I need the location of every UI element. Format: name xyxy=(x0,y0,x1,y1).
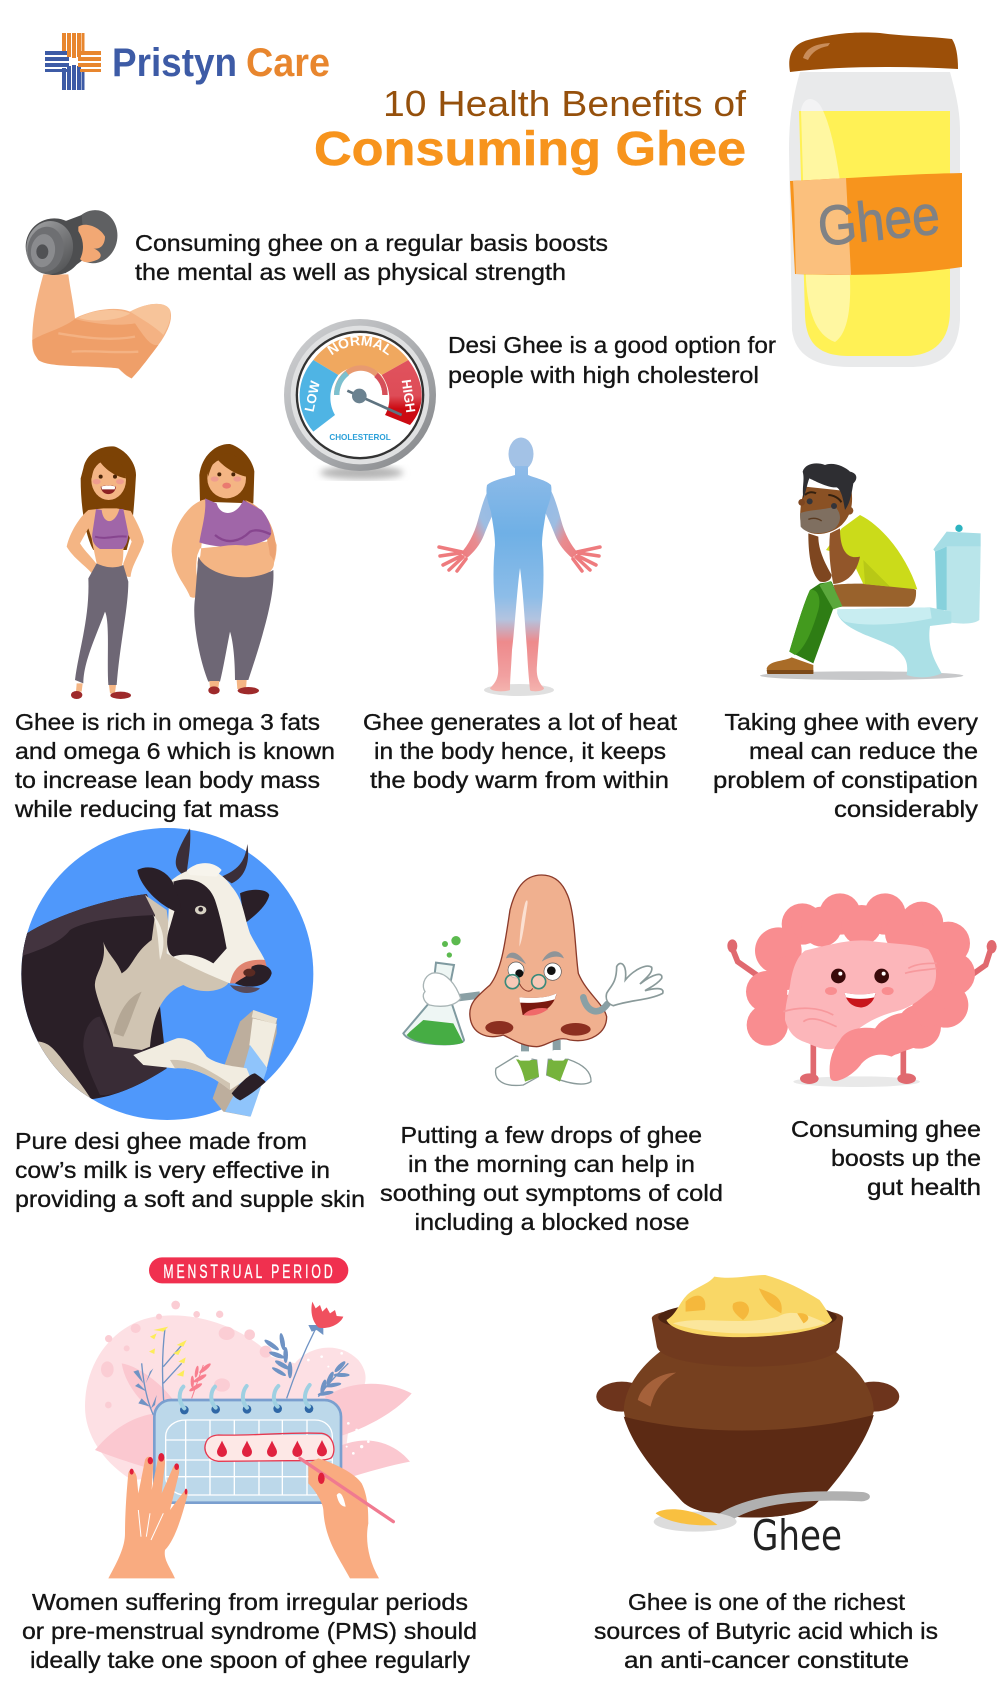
gauge labels xyxy=(302,336,418,442)
text: gut health benefit: Consuming ghee xyxy=(791,1116,981,1142)
text: gut health benefit: boosts up the xyxy=(831,1145,981,1171)
text: strength benefit xyxy=(135,230,608,285)
logo wordmark: Pristyn xyxy=(112,41,237,85)
icon: clay pot of ghee with spoon xyxy=(596,1275,899,1560)
pink background xyxy=(85,1301,412,1483)
man's head xyxy=(798,463,856,534)
gauge labels: NORMAL xyxy=(327,336,390,356)
toilet xyxy=(837,525,981,677)
milk carton xyxy=(213,1010,277,1117)
icon: man on toilet xyxy=(760,463,981,680)
icon: smiling intestine xyxy=(727,893,997,1087)
title xyxy=(314,83,747,176)
badge: menstrual period: MENSTRUAL PERIOD xyxy=(163,1262,336,1283)
text: butyric acid benefit: an anti-cancer constitute xyxy=(624,1647,909,1673)
jar label text: Ghee xyxy=(815,183,943,258)
left hand xyxy=(108,1453,188,1578)
text: cholesterol benefit: Desi Ghee is a good option for xyxy=(448,332,776,358)
logo wordmark xyxy=(112,41,330,85)
cow head xyxy=(137,828,272,993)
slim woman xyxy=(67,446,144,699)
icon: arm lifting dumbbell xyxy=(22,206,171,378)
text: menstrual health benefit: Women suffering from irregular periods xyxy=(32,1589,468,1615)
text: butyric acid benefit xyxy=(594,1589,938,1673)
text: skin benefit: Pure desi ghee made from xyxy=(15,1128,307,1154)
inner belly xyxy=(785,940,936,1049)
text: constipation benefit: Taking ghee with every xyxy=(724,709,979,735)
benefit 10: butyric acid xyxy=(594,1275,938,1673)
gauge labels: CHOLESTEROL xyxy=(329,432,391,442)
legs and shoes xyxy=(496,1040,591,1085)
text: menstrual health benefit xyxy=(22,1589,477,1673)
pot label text: Ghee xyxy=(752,1511,842,1560)
text: body heat benefit: the body warm from within xyxy=(370,767,669,793)
benefit 4: body heat xyxy=(363,438,678,793)
text: strength benefit: the mental as well as physical strength xyxy=(135,259,566,285)
text: skin benefit: cow’s milk is very effective in xyxy=(15,1157,330,1183)
right hand with pen xyxy=(300,1458,393,1578)
text: lean body mass benefit: and omega 6 which is known xyxy=(15,738,335,764)
text: lean body mass benefit xyxy=(14,709,335,822)
text: body heat benefit: Ghee generates a lot of heat xyxy=(363,709,678,735)
text: constipation benefit: problem of constipation xyxy=(713,767,978,793)
icon: logo cross of hands xyxy=(45,33,101,90)
icon: human body heat map xyxy=(439,438,600,696)
text: blocked nose benefit: in the morning can help in xyxy=(408,1151,695,1177)
text: menstrual health benefit: ideally take one spoon of ghee regularly xyxy=(30,1647,471,1673)
text: blocked nose benefit xyxy=(380,1122,723,1235)
cow body xyxy=(10,894,272,1102)
man's arms xyxy=(808,533,832,582)
face xyxy=(505,951,564,1016)
text: butyric acid benefit: Ghee is one of the richest xyxy=(628,1589,906,1615)
text: strength benefit: Consuming ghee on a regular basis boosts xyxy=(135,230,608,256)
text: lean body mass benefit: while reducing fat mass xyxy=(14,796,279,822)
icon: cholesterol gauge xyxy=(284,319,436,481)
left arm and flask xyxy=(403,936,480,1045)
benefit 2: cholesterol xyxy=(284,319,776,481)
text: menstrual health benefit: or pre-menstrual syndrome (PMS) should xyxy=(22,1618,477,1644)
benefit 5: constipation xyxy=(713,463,981,822)
logo: Pristyn Care xyxy=(45,33,330,90)
benefit 9: menstrual health xyxy=(22,1257,477,1673)
calendar xyxy=(154,1385,341,1503)
gauge labels: HIGH xyxy=(399,378,418,414)
benefit 8: gut health xyxy=(727,893,997,1200)
text: lean body mass benefit: to increase lean body mass xyxy=(15,767,320,793)
text: gut health benefit: gut health xyxy=(867,1174,981,1200)
text: body heat benefit xyxy=(363,709,678,793)
logo wordmark: Care xyxy=(246,41,330,85)
title: 10 Health Benefits of xyxy=(383,83,747,124)
text: blocked nose benefit: including a blocked nose xyxy=(414,1209,690,1235)
text: constipation benefit: considerably xyxy=(834,796,979,822)
lower intestine tail xyxy=(830,1013,928,1081)
nose body xyxy=(470,875,607,1047)
limbs xyxy=(727,939,997,1084)
text: butyric acid benefit: sources of Butyric acid which is xyxy=(594,1618,938,1644)
title: Consuming Ghee xyxy=(314,123,746,176)
text: blocked nose benefit: soothing out symptoms of cold xyxy=(380,1180,723,1206)
text: blocked nose benefit: Putting a few drops of ghee xyxy=(400,1122,702,1148)
text: skin benefit xyxy=(15,1128,365,1212)
icon: two women lean and overweight xyxy=(67,444,277,699)
icon: ghee jar xyxy=(789,33,962,367)
text: body heat benefit: in the body hence, it keeps xyxy=(374,738,666,764)
plants and flowers xyxy=(142,1328,348,1415)
right arm and glove xyxy=(583,963,663,1011)
gauge labels: LOW xyxy=(302,379,323,413)
intestine bumps xyxy=(746,893,975,1055)
text: gut health benefit xyxy=(791,1116,981,1200)
benefit 1: strength xyxy=(22,206,608,378)
icon: cartoon nose scientist xyxy=(403,875,663,1085)
benefit 6: skin xyxy=(10,828,365,1212)
text: cholesterol benefit: people with high cholesterol xyxy=(448,362,759,388)
icon: menstrual calendar illustration xyxy=(85,1257,412,1578)
icon: cow with milk carton on blue circle xyxy=(10,828,313,1120)
text: constipation benefit xyxy=(713,709,979,822)
text: cholesterol benefit xyxy=(448,332,776,388)
benefit 7: blocked nose xyxy=(380,875,723,1235)
badge: menstrual period xyxy=(149,1257,348,1283)
plus-size woman xyxy=(172,444,277,694)
benefit 3: lean body mass xyxy=(14,444,335,822)
text: lean body mass benefit: Ghee is rich in omega 3 fats xyxy=(15,709,320,735)
text: skin benefit: providing a soft and supple skin xyxy=(15,1186,365,1212)
face xyxy=(825,969,894,1007)
text: constipation benefit: meal can reduce the xyxy=(749,738,978,764)
